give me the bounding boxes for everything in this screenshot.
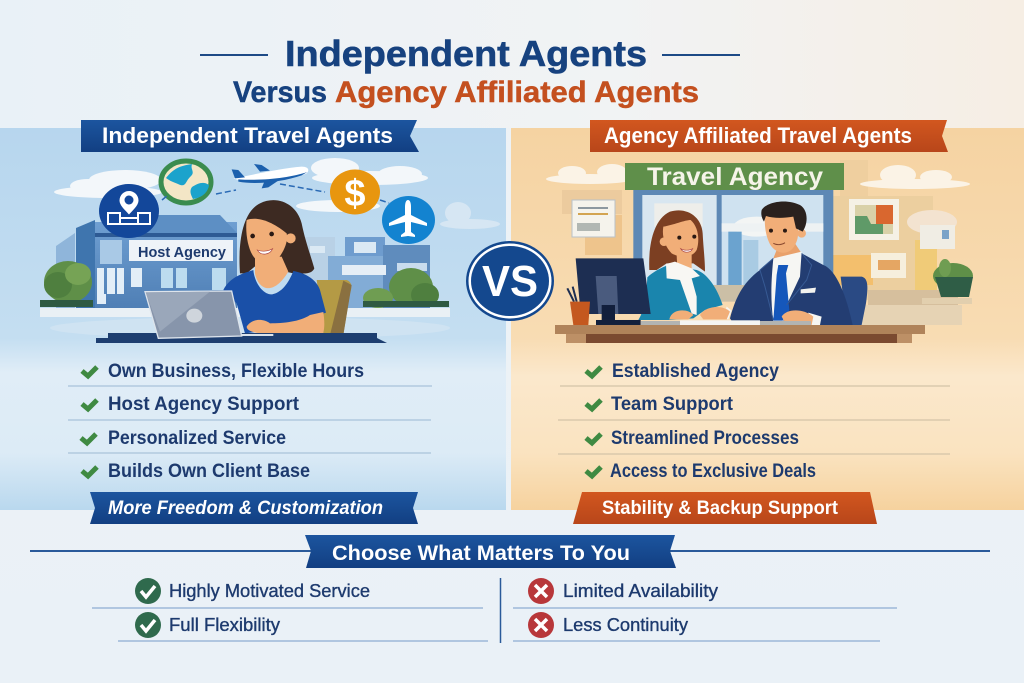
bush right [363,268,449,308]
icon: location pin [99,184,159,238]
banner: independent travel agents: Independent Travel Agents [102,123,393,148]
ribbon: stability and backup support: Stability & Backup Support [602,498,839,519]
item 4: Builds Own Client Base [108,461,310,482]
sign: host agency: Host Agency [138,244,227,261]
ribbon: more freedom and customization [90,492,418,524]
right buildings [305,237,430,308]
item 1: Own Business, Flexible Hours [108,361,364,382]
panel: agency affiliated travel agents [511,120,1024,510]
man chair [841,277,867,325]
con 1 [528,578,718,604]
sign: travel agency: Travel Agency [647,163,823,191]
illustration: agency office with two agents [546,160,973,343]
item 3: Personalized Service [108,428,286,449]
icon: plane circle [382,196,435,244]
icon: globe [161,161,211,203]
bush left [40,261,93,307]
woman [223,200,326,339]
papers on desk [641,321,811,325]
section heading: choose what matters to you: Choose What Matters To You [332,542,630,565]
pros list [92,578,488,641]
clouds [546,164,970,234]
section heading: choose what matters to you [30,535,990,568]
desk [96,333,387,343]
con 2 [528,612,688,638]
ribbon: more freedom and customization: More Freedom & Customization [108,498,383,519]
pro 1: Highly Motivated Service [169,581,370,601]
item 2: Host Agency Support [108,394,300,415]
man agent [700,201,853,325]
illustration: independent agent at host agency [40,158,500,343]
item 4: Access to Exclusive Deals [610,461,816,482]
desk [555,325,925,343]
icon: airplane with route [162,164,389,203]
cons list [513,578,897,641]
pro 2: Full Flexibility [169,615,280,635]
icon: dollar [330,170,380,215]
laptop [145,291,273,338]
clouds [54,158,500,229]
panel: independent travel agents [0,120,506,510]
two agents [567,201,867,326]
title: Versus [233,76,327,109]
banner: agency affiliated travel agents: Agency Affiliated Travel Agents [604,123,912,148]
item 2: Team Support [611,394,734,415]
checklist: agency affiliated agents [558,361,950,482]
icon: dollar: $ [344,173,366,215]
pro 1 [135,578,370,604]
plant and side shelf [922,259,973,304]
pencil cup [567,283,591,325]
VS badge [466,241,554,321]
ribbon: stability and backup support [573,492,877,524]
VS badge: VS [482,257,538,306]
item 1: Established Agency [612,361,779,382]
title: Independent Agents [285,33,647,74]
wall blocks [562,160,962,325]
divider between pros and cons [500,578,502,643]
title [200,33,740,109]
wall pictures [572,199,955,278]
chair [317,280,351,335]
banner: independent travel agents [81,120,419,152]
con 1: Limited Availability [563,581,718,601]
checklist: independent agents [68,361,432,482]
woman agent [638,210,723,320]
title: Agency Affiliated Agents [335,76,699,109]
con 2: Less Continuity [563,615,688,635]
woman with chair and laptop [223,200,352,339]
ground [40,308,450,317]
building: host agency [56,215,237,308]
monitor [576,258,651,325]
item 3: Streamlined Processes [611,428,799,449]
window [633,190,833,302]
pro 2 [135,612,280,638]
